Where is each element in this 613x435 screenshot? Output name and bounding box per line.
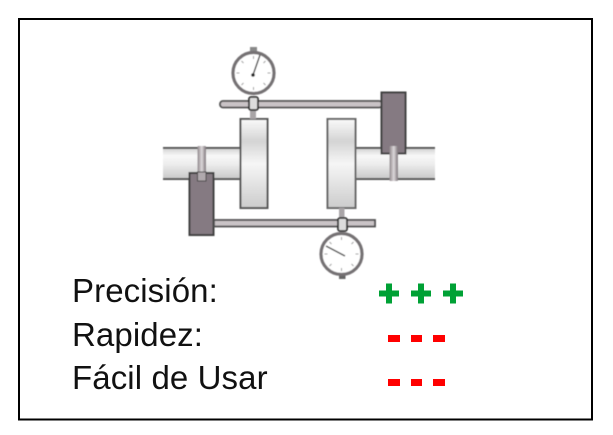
lower bar (214, 220, 375, 226)
rating: three plus signs (379, 284, 463, 304)
row: Rapidez: Rapidez: (72, 316, 203, 353)
left shaft (163, 148, 241, 179)
row: Precisión: Precisión: (72, 272, 218, 309)
left clamp overlap (198, 172, 206, 181)
upper knob (249, 97, 258, 110)
upper dial gauge (233, 47, 274, 94)
row: Precisión (72, 272, 463, 309)
diagram: shaft alignment with dial indicators (163, 47, 435, 279)
right clamp (390, 146, 398, 181)
row: Fácil de Usar (72, 359, 445, 396)
left clamp (198, 146, 206, 182)
row: Rapidez (72, 316, 445, 353)
upper magnetic base (382, 92, 406, 154)
upper connector (250, 107, 256, 119)
lower magnetic base (190, 173, 214, 235)
lower knob (338, 218, 347, 231)
row: Fácil de Usar: Fácil de Usar (72, 359, 268, 396)
rating: three minus signs (388, 335, 445, 342)
right coupling disc (328, 119, 356, 208)
right shaft (354, 148, 435, 179)
upper bar (220, 101, 382, 108)
lower connector (339, 208, 344, 219)
lower dial gauge (321, 234, 362, 279)
rating: three minus signs (388, 379, 445, 386)
left coupling disc (240, 119, 268, 208)
